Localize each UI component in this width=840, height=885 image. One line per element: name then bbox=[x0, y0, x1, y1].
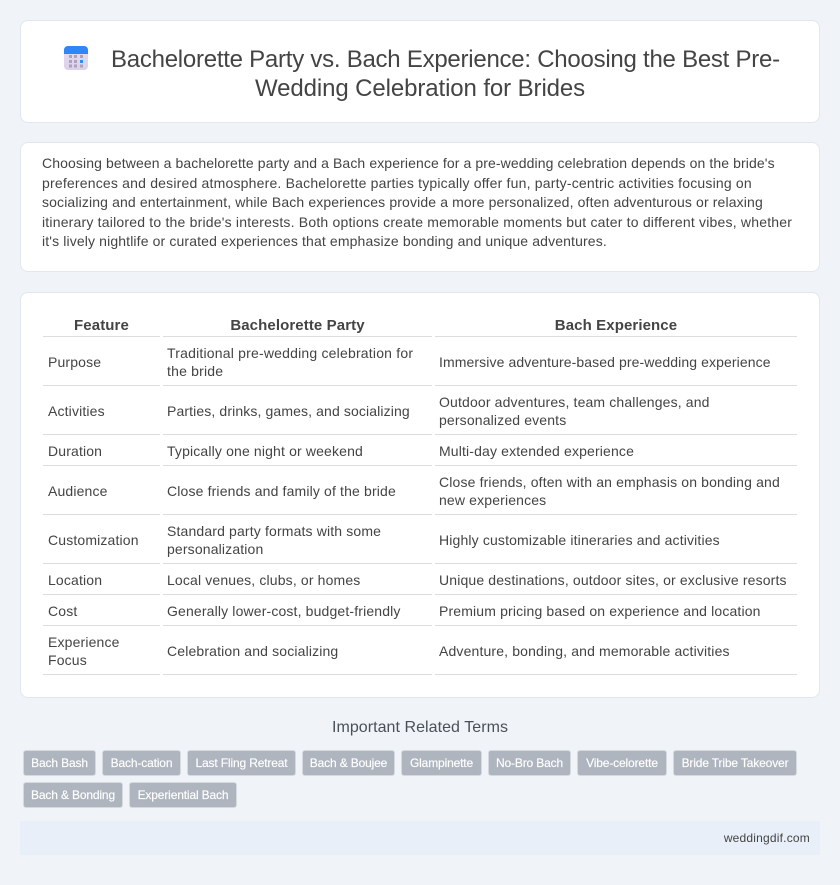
comparison table: personalized events bbox=[439, 412, 566, 428]
comparison table: Immersive adventure-based pre-wedding experience bbox=[439, 354, 771, 370]
tag bbox=[102, 750, 181, 776]
comparison table: Purpose bbox=[48, 354, 101, 370]
related terms tags bbox=[23, 750, 797, 808]
comparison table: Experience bbox=[48, 634, 120, 650]
tag: Experiential Bach bbox=[138, 788, 228, 802]
comparison table: Adventure, bonding, and memorable activities bbox=[439, 643, 730, 659]
comparison table: Cost bbox=[48, 603, 77, 619]
comparison table: Bach Experience bbox=[555, 317, 677, 334]
intro text bbox=[42, 155, 792, 249]
comparison table: Celebration and socializing bbox=[167, 643, 338, 659]
comparison table: Generally lower-cost, budget-friendly bbox=[167, 603, 401, 619]
comparison table: Feature bbox=[74, 317, 129, 334]
comparison table: the bride bbox=[167, 363, 223, 379]
intro panel bbox=[20, 142, 820, 272]
tag: Bach & Bonding bbox=[31, 788, 115, 802]
comparison table: Bachelorette Party bbox=[230, 317, 365, 334]
comparison table bbox=[43, 317, 797, 675]
intro text: Choosing between a bachelorette party and a Bach experience for a pre-wedding celebration depends on the bride's bbox=[42, 155, 775, 171]
icon: calendar bbox=[64, 46, 88, 70]
comparison table: Highly customizable itineraries and activities bbox=[439, 532, 720, 548]
intro text: socializing and entertainment, while Bach experiences provide a more personalized, often adventurous or relaxing bbox=[42, 194, 763, 210]
tag bbox=[488, 750, 571, 776]
comparison table: Duration bbox=[48, 443, 102, 459]
tag bbox=[187, 750, 296, 776]
comparison table: Audience bbox=[48, 483, 108, 499]
tag bbox=[129, 782, 237, 808]
comparison table panel bbox=[20, 292, 820, 698]
tag bbox=[23, 782, 123, 808]
comparison table: new experiences bbox=[439, 492, 546, 508]
title: Bachelorette Party vs. Bach Experience: Choosing the Best Pre- bbox=[111, 46, 780, 73]
tag: Glampinette bbox=[410, 756, 473, 770]
tag: Bach Bash bbox=[31, 756, 88, 770]
intro text: itinerary tailored to the bride's interests. Both options create memorable moments but cater to different vibes, whether bbox=[42, 214, 792, 230]
title bbox=[111, 46, 780, 102]
tag bbox=[23, 750, 96, 776]
comparison table: Location bbox=[48, 572, 102, 588]
comparison table: Multi-day extended experience bbox=[439, 443, 634, 459]
intro text: preferences and desired atmosphere. Bachelorette parties typically offer fun, party-centric activities focusing on bbox=[42, 175, 752, 191]
comparison table: Customization bbox=[48, 532, 139, 548]
tag: Bach-cation bbox=[111, 756, 172, 770]
comparison table: Close friends and family of the bride bbox=[167, 483, 396, 499]
tag: No-Bro Bach bbox=[496, 756, 563, 770]
tag: Bride Tribe Takeover bbox=[682, 756, 788, 770]
comparison table: Parties, drinks, games, and socializing bbox=[167, 403, 410, 419]
comparison table: Local venues, clubs, or homes bbox=[167, 572, 360, 588]
tag bbox=[401, 750, 482, 776]
tag bbox=[302, 750, 395, 776]
comparison table: Typically one night or weekend bbox=[167, 443, 363, 459]
title: Wedding Celebration for Brides bbox=[255, 75, 585, 102]
intro text: it's lively nightlife or curated experiences that emphasize bonding and unique adventures. bbox=[42, 233, 607, 249]
comparison table: Unique destinations, outdoor sites, or exclusive resorts bbox=[439, 572, 787, 588]
footer bar bbox=[20, 821, 820, 855]
related terms heading: Important Related Terms bbox=[332, 719, 508, 736]
tag bbox=[673, 750, 797, 776]
comparison table: Traditional pre-wedding celebration for bbox=[167, 345, 413, 361]
tag: Vibe-celorette bbox=[586, 756, 658, 770]
comparison table: Focus bbox=[48, 652, 87, 668]
comparison table: Activities bbox=[48, 403, 105, 419]
comparison table: Premium pricing based on experience and location bbox=[439, 603, 761, 619]
tag bbox=[577, 750, 667, 776]
comparison table: personalization bbox=[167, 541, 263, 557]
comparison table: Outdoor adventures, team challenges, and bbox=[439, 394, 710, 410]
header panel bbox=[20, 20, 820, 123]
tag: Last Fling Retreat bbox=[195, 756, 288, 770]
comparison table: Standard party formats with some bbox=[167, 523, 381, 539]
comparison table: Close friends, often with an emphasis on bonding and bbox=[439, 474, 780, 490]
footer source: weddingdif.com bbox=[724, 831, 810, 845]
tag: Bach & Boujee bbox=[310, 756, 387, 770]
